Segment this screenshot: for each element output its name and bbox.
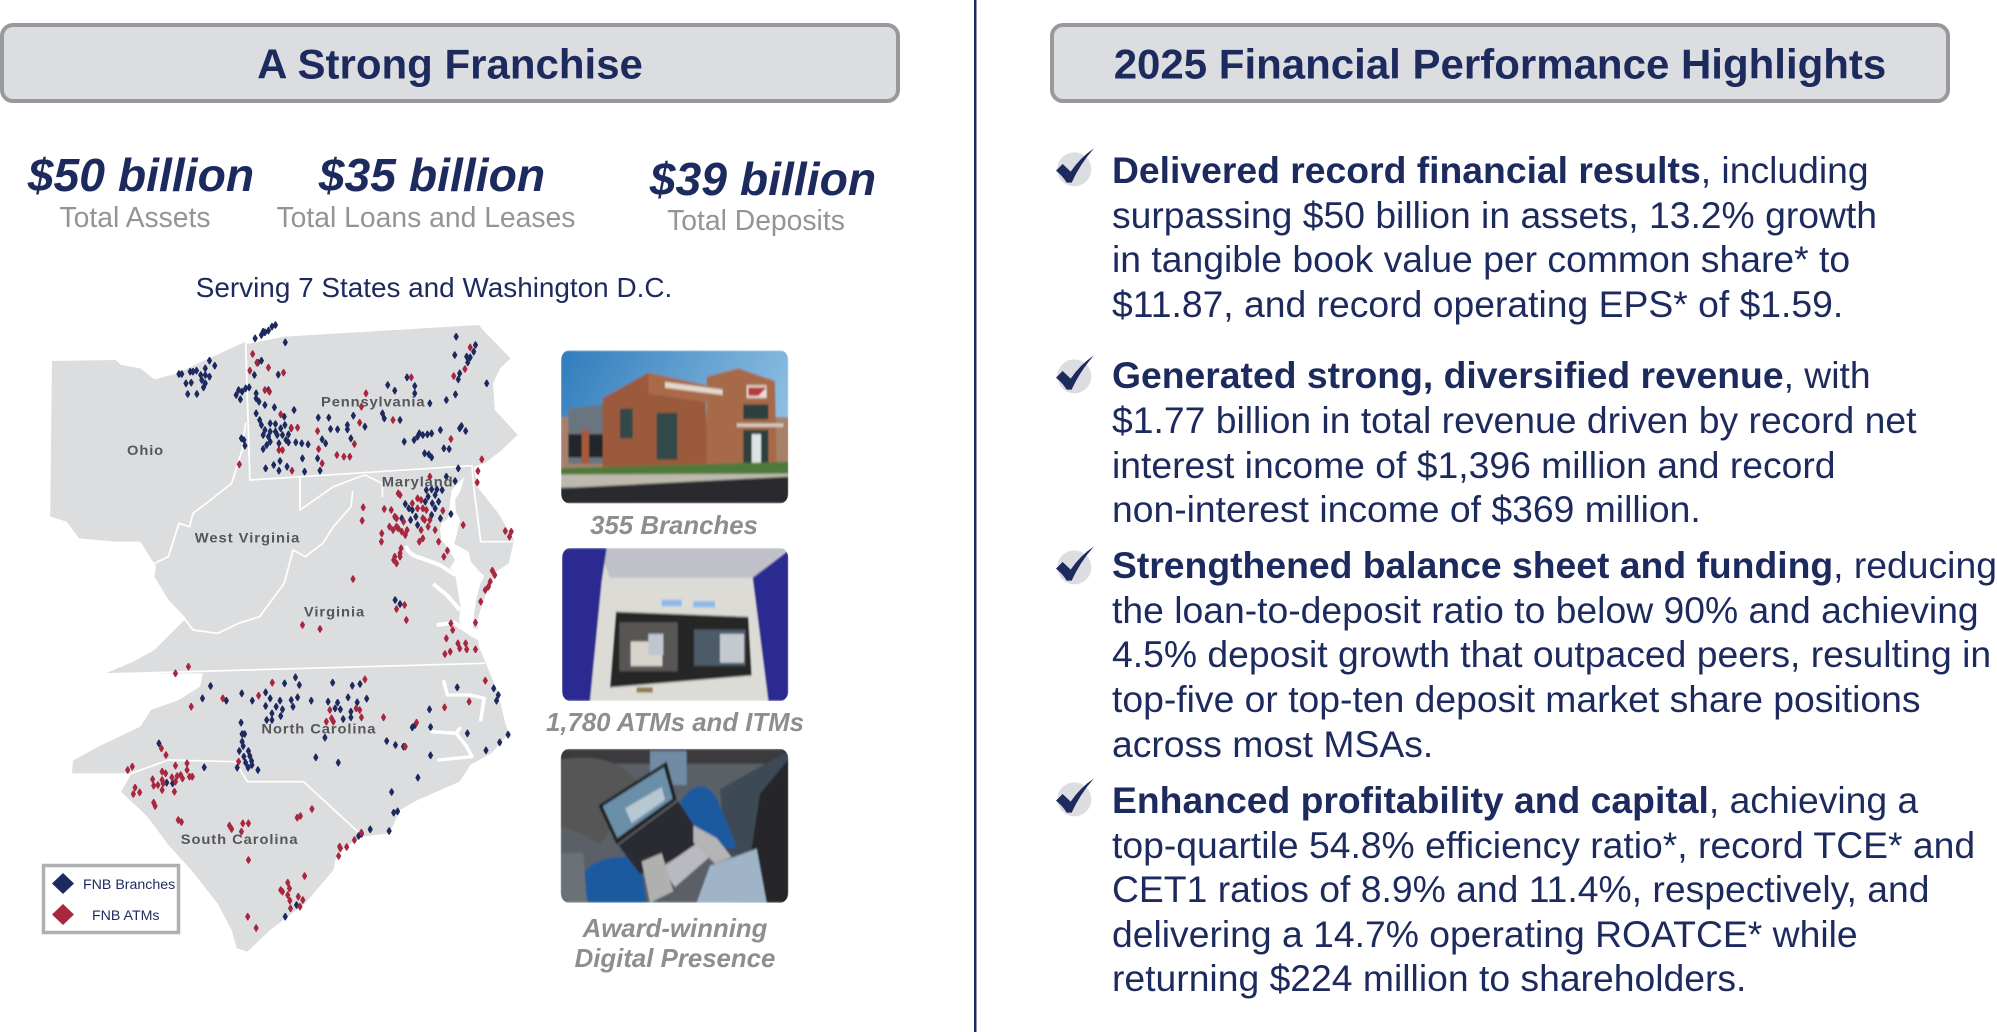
state labels: Pennsylvania <box>321 395 426 411</box>
stat: total loans and leases: $35 billion <box>318 149 545 201</box>
text: balance sheet and funding: the loan-to-deposit ratio to below 90% and achieving <box>1112 589 1979 631</box>
text: record financial results: $11.87, and record operating EPS* of $1.59. <box>1112 283 1843 325</box>
icon: check mark 2 <box>1056 355 1094 393</box>
text: record financial results <box>1112 149 1877 325</box>
text: balance sheet and funding <box>1112 544 1997 765</box>
state labels: North Carolina <box>261 722 376 737</box>
caption: digital presence: Award-winning <box>582 915 768 943</box>
stat: total deposits: $39 billion <box>649 153 876 205</box>
text: diversified revenue: $1.77 billion in total revenue driven by record net <box>1112 399 1917 441</box>
text: balance sheet and funding: Strengthened balance sheet and funding, reducing <box>1112 544 1997 586</box>
navy branch markers <box>157 322 510 920</box>
icon: check mark 1 <box>1056 148 1094 186</box>
caption: digital presence: Digital Presence <box>575 945 775 973</box>
heading: 2025 financial performance highlights: 2025 Financial Performance Highlights <box>1114 40 1886 88</box>
map legend: FNB Branches <box>83 877 175 893</box>
text: profitability and capital: top-quartile 54.8% efficiency ratio*, record TCE* and <box>1112 824 1975 866</box>
panel: 2025 financial performance highlights <box>1052 25 1997 999</box>
heading: a strong franchise: A Strong Franchise <box>257 40 643 88</box>
map legend: FNB ATMs <box>92 908 160 924</box>
highlight 3 <box>1056 544 1997 765</box>
text: balance sheet and funding: top-five or top-ten deposit market share positions <box>1112 678 1921 720</box>
highlight 4 <box>1056 778 1975 999</box>
icon: check mark 3 <box>1056 546 1094 584</box>
highlight 1 <box>1056 148 1877 325</box>
caption: ATMs and ITMs: 1,780 ATMs and ITMs <box>546 709 804 737</box>
photo cards column <box>546 350 804 973</box>
text: record financial results: surpassing $50 billion in assets, 13.2% growth <box>1112 194 1877 236</box>
map: branch and ATM footprint <box>44 322 518 952</box>
text: profitability and capital: returning $224 million to shareholders. <box>1112 957 1746 999</box>
state labels: West Virginia <box>195 531 300 546</box>
red ATM markers <box>126 344 513 931</box>
stat: total assets: Total Assets <box>60 201 210 233</box>
stat: total deposits <box>649 153 876 236</box>
caption: digital presence <box>575 915 775 973</box>
state labels: Maryland <box>382 475 453 491</box>
text: balance sheet and funding: 4.5% deposit growth that outpaced peers, resulting in <box>1112 633 1991 675</box>
divider line <box>974 0 976 1032</box>
photo: digital laptop <box>561 749 788 903</box>
highlight 2 <box>1056 354 1917 530</box>
state labels: Virginia <box>304 605 365 621</box>
map land area <box>50 325 518 952</box>
state labels: Ohio <box>127 443 163 459</box>
stat: total loans and leases <box>277 149 575 233</box>
text: record financial results: Delivered record financial results, including <box>1112 149 1869 191</box>
text: diversified revenue: non-interest income of $369 million. <box>1112 488 1701 530</box>
text: record financial results: in tangible book value per common share* to <box>1112 238 1850 280</box>
heading: 2025 financial performance highlights <box>1052 25 1948 101</box>
map land and markers <box>50 322 518 952</box>
text: diversified revenue: Generated strong, diversified revenue, with <box>1112 354 1871 396</box>
map state borders and sounds <box>105 342 512 835</box>
photo: bank branch <box>561 350 788 503</box>
map subtitle: Serving 7 States and Washington D.C. <box>196 272 672 303</box>
icon: check mark 4 <box>1056 778 1094 816</box>
heading: a strong franchise <box>2 25 898 101</box>
state labels: South Carolina <box>181 832 299 848</box>
photo: ATM <box>562 548 788 701</box>
stat: total loans and leases: Total Loans and Leases <box>277 201 575 233</box>
caption: 355 branches: 355 Branches <box>590 512 758 540</box>
text: profitability and capital: CET1 ratios of 8.9% and 11.4%, respectively, and <box>1112 868 1930 910</box>
text: diversified revenue <box>1112 354 1917 530</box>
stat: total deposits: Total Deposits <box>667 204 845 236</box>
chesapeake bay water <box>406 477 487 640</box>
text: profitability and capital: delivering a 14.7% operating ROATCE* while <box>1112 913 1858 955</box>
text: profitability and capital: Enhanced profitability and capital, achieving a <box>1112 779 1919 821</box>
text: profitability and capital <box>1112 779 1975 999</box>
text: balance sheet and funding: across most MSAs. <box>1112 723 1433 765</box>
state labels <box>127 395 453 848</box>
map legend <box>44 866 178 932</box>
stat: total assets: $50 billion <box>27 149 254 201</box>
stat: total assets <box>27 149 254 233</box>
panel: a strong franchise <box>2 25 898 973</box>
text: diversified revenue: interest income of $1,396 million and record <box>1112 444 1836 486</box>
